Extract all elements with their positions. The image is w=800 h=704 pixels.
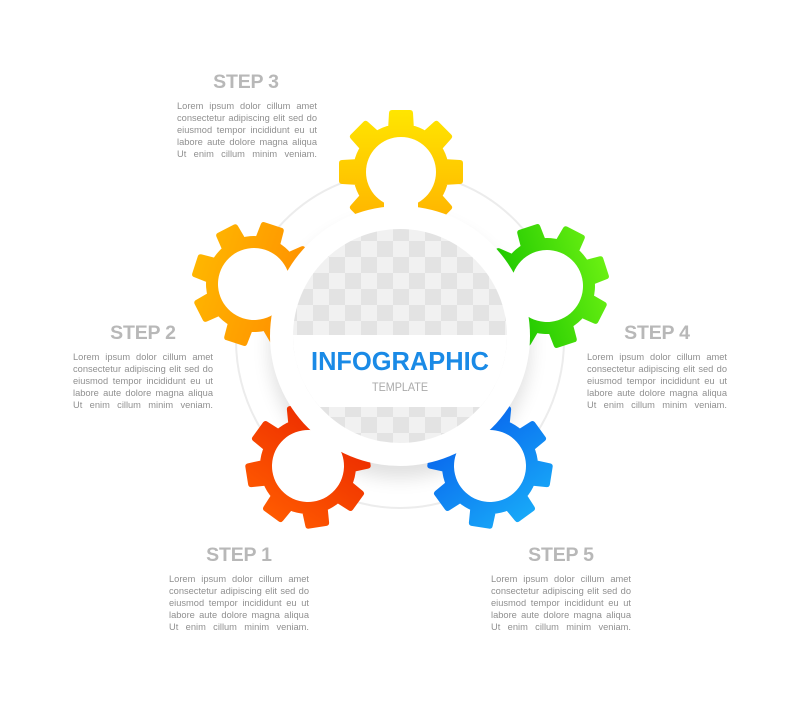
text: step 1: Lorem ipsum dolor cillum amet xyxy=(169,574,309,584)
text: step 4: eiusmod tempor incididunt eu ut xyxy=(587,376,727,386)
text: step 5: consectetur adipiscing elit sed do xyxy=(491,586,631,596)
text: step 4: Ut enim cillum minim veniam. xyxy=(587,400,727,410)
text: step 1: consectetur adipiscing elit sed do xyxy=(169,586,309,596)
text: step 2: consectetur adipiscing elit sed do xyxy=(73,364,213,374)
heading: step 5: STEP 5 xyxy=(528,544,594,566)
text: step 5 xyxy=(491,574,632,632)
text: step 1: eiusmod tempor incididunt eu ut xyxy=(169,598,309,608)
text: step 5: Lorem ipsum dolor cillum amet xyxy=(491,574,631,584)
text: step 2: eiusmod tempor incididunt eu ut xyxy=(73,376,213,386)
heading: step 2: STEP 2 xyxy=(110,322,176,344)
text: step 1: Ut enim cillum minim veniam. xyxy=(169,622,309,632)
gear: step 5 blue xyxy=(403,379,577,553)
transparent checker placeholder xyxy=(290,225,510,447)
text: step 3 xyxy=(177,101,318,159)
text: step 1 xyxy=(169,574,310,632)
title: INFOGRAPHIC xyxy=(311,346,489,376)
gear: step 3 yellow xyxy=(339,110,463,234)
text: step 2: Ut enim cillum minim veniam. xyxy=(73,400,213,410)
text: step 1: labore aute dolore magna aliqua xyxy=(169,610,309,620)
text: step 3: consectetur adipiscing elit sed do xyxy=(177,113,317,123)
text: step 4: consectetur adipiscing elit sed do xyxy=(587,364,727,374)
central disc shadow xyxy=(270,218,530,478)
text: step 4 xyxy=(587,352,728,410)
text: step 5: eiusmod tempor incididunt eu ut xyxy=(491,598,631,608)
gear: step 1 red xyxy=(221,379,395,553)
text: step 4: labore aute dolore magna aliqua xyxy=(587,388,727,398)
gear: step 4 green xyxy=(469,208,625,364)
text: step 4: Lorem ipsum dolor cillum amet xyxy=(587,352,727,362)
text: step 3: Ut enim cillum minim veniam. xyxy=(177,149,317,159)
subtitle: TEMPLATE xyxy=(372,380,428,394)
heading: step 1: STEP 1 xyxy=(206,544,272,566)
text: step 3: eiusmod tempor incididunt eu ut xyxy=(177,125,317,135)
gear: step 2 orange xyxy=(176,206,332,362)
text: step 5: labore aute dolore magna aliqua xyxy=(491,610,631,620)
outer ring xyxy=(236,172,564,508)
central white disc xyxy=(270,206,530,466)
text: step 2: labore aute dolore magna aliqua xyxy=(73,388,213,398)
text: step 3: Lorem ipsum dolor cillum amet xyxy=(177,101,317,111)
heading: step 4: STEP 4 xyxy=(624,322,690,344)
text: step 3: labore aute dolore magna aliqua xyxy=(177,137,317,147)
text: step 2 xyxy=(73,352,214,410)
text: step 5: Ut enim cillum minim veniam. xyxy=(491,622,631,632)
text: step 2: Lorem ipsum dolor cillum amet xyxy=(73,352,213,362)
heading: step 3: STEP 3 xyxy=(213,71,279,93)
